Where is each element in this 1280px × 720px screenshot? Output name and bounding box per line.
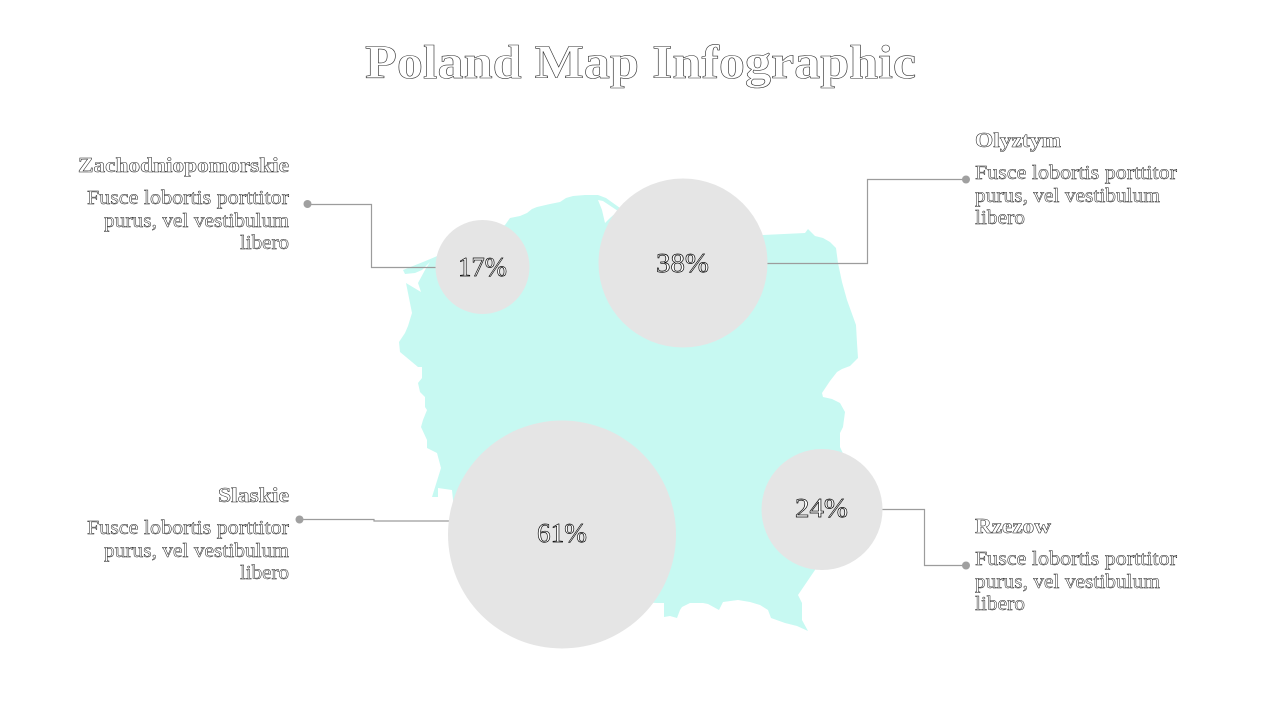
label: Rzezow: Rzezow <box>975 514 1052 538</box>
bubble: 38%: 38% <box>656 248 709 278</box>
bubble: 24%: 24% <box>795 493 848 523</box>
label: Zachodniopomorskie: libero <box>240 232 289 254</box>
label: Rzezow: Fusce lobortis porttitor <box>975 548 1177 570</box>
label: Slaskie: libero <box>240 562 289 584</box>
label: Slaskie <box>87 483 289 584</box>
connector: Zachodniopomorskie <box>304 200 437 268</box>
label: Olyztym: purus, vel vestibulum <box>975 185 1160 207</box>
label: Zachodniopomorskie: purus, vel vestibulum <box>104 210 289 232</box>
label: Olyztym <box>975 128 1177 229</box>
label: Rzezow: libero <box>975 593 1025 615</box>
connector: Slaskie <box>296 516 449 524</box>
label: Rzezow <box>975 514 1177 615</box>
bubble: 61%: 61% <box>537 518 587 548</box>
label: Zachodniopomorskie: Zachodniopomorskie <box>78 153 289 177</box>
label: Olyztym: Fusce lobortis porttitor <box>975 162 1177 184</box>
bubble: 61% <box>448 420 676 648</box>
label: Olyztym: libero <box>975 207 1025 229</box>
bubble: 24% <box>762 449 882 570</box>
label: Zachodniopomorskie <box>78 153 289 254</box>
label: Slaskie: purus, vel vestibulum <box>104 540 289 562</box>
title: Poland Map Infographic <box>365 36 916 89</box>
connector: Olyztym <box>766 176 970 264</box>
label: Slaskie: Fusce lobortis porttitor <box>87 517 289 539</box>
bubble: 17% <box>436 220 530 314</box>
label: Rzezow: purus, vel vestibulum <box>975 571 1160 593</box>
map of Poland <box>399 195 858 631</box>
label: Slaskie: Slaskie <box>218 483 289 507</box>
bubble: 17%: 17% <box>458 252 507 282</box>
connector: Rzezow <box>882 510 970 570</box>
bubble: 38% <box>598 178 768 348</box>
label: Olyztym: Olyztym <box>975 128 1062 152</box>
label: Zachodniopomorskie: Fusce lobortis porttitor <box>87 187 289 209</box>
